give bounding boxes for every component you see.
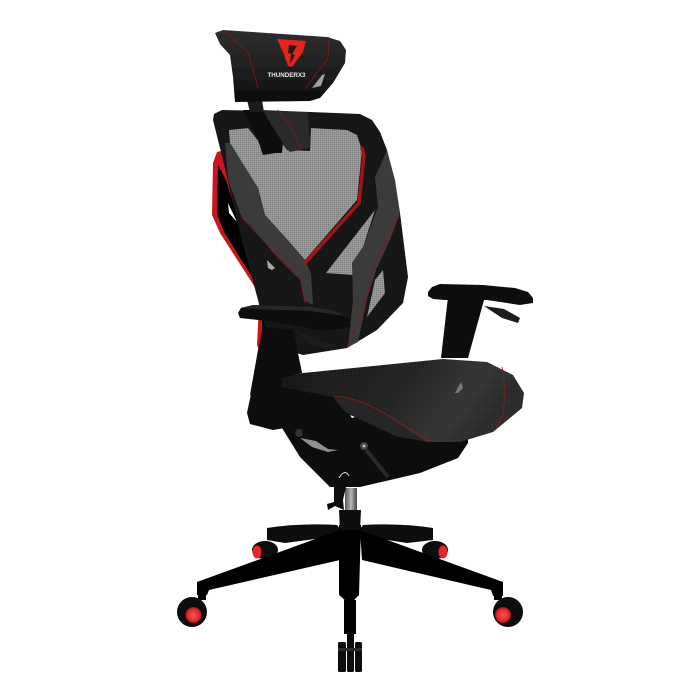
seat: [282, 359, 524, 442]
caster: front left: [177, 597, 207, 627]
back: side grey opening: [267, 260, 275, 270]
gas cylinder: [339, 488, 361, 530]
right arm: post: [441, 297, 484, 358]
headrest: stitching: [224, 31, 258, 88]
left arm: lever: [295, 330, 336, 350]
headrest: highlight: [312, 74, 325, 88]
armrest: left: [238, 305, 351, 395]
seat: front underside: [333, 397, 427, 442]
caster: rear right: [422, 541, 448, 559]
base: front legs: [197, 525, 503, 643]
headrest: [215, 30, 346, 102]
left arm: post: [250, 327, 302, 395]
base: rear legs: [267, 524, 433, 543]
back: headrest mount: [263, 110, 310, 152]
back: upper grey mesh: [229, 128, 362, 260]
mechanism under seat: [280, 380, 468, 487]
headrest: brand name: THUNDERX3: [268, 72, 306, 79]
seat: highlight: [455, 382, 463, 393]
caster: rear left: [252, 541, 278, 559]
back: black strap: [243, 110, 283, 155]
right arm: pad: [428, 284, 533, 305]
headrest stem: [247, 100, 264, 112]
left arm: pad: [238, 305, 351, 331]
seat lever: [327, 469, 349, 510]
back: right dark panel: [348, 150, 400, 347]
chair spine: [247, 327, 302, 430]
back: red stitching: [242, 110, 399, 347]
headrest: logo: [277, 39, 306, 67]
back: small grey mesh: [367, 270, 385, 317]
black back support: [217, 165, 285, 345]
seat: stitching: [334, 396, 429, 441]
caster: front right: [493, 597, 523, 627]
red back frame: [212, 150, 272, 358]
back: left dark panel: [225, 143, 313, 305]
mesh backrest: [213, 110, 408, 355]
back: lower grey mesh: [326, 210, 375, 275]
armrest: right: [428, 284, 533, 358]
caster: front centre: [338, 640, 362, 672]
right arm: lever: [484, 306, 520, 323]
